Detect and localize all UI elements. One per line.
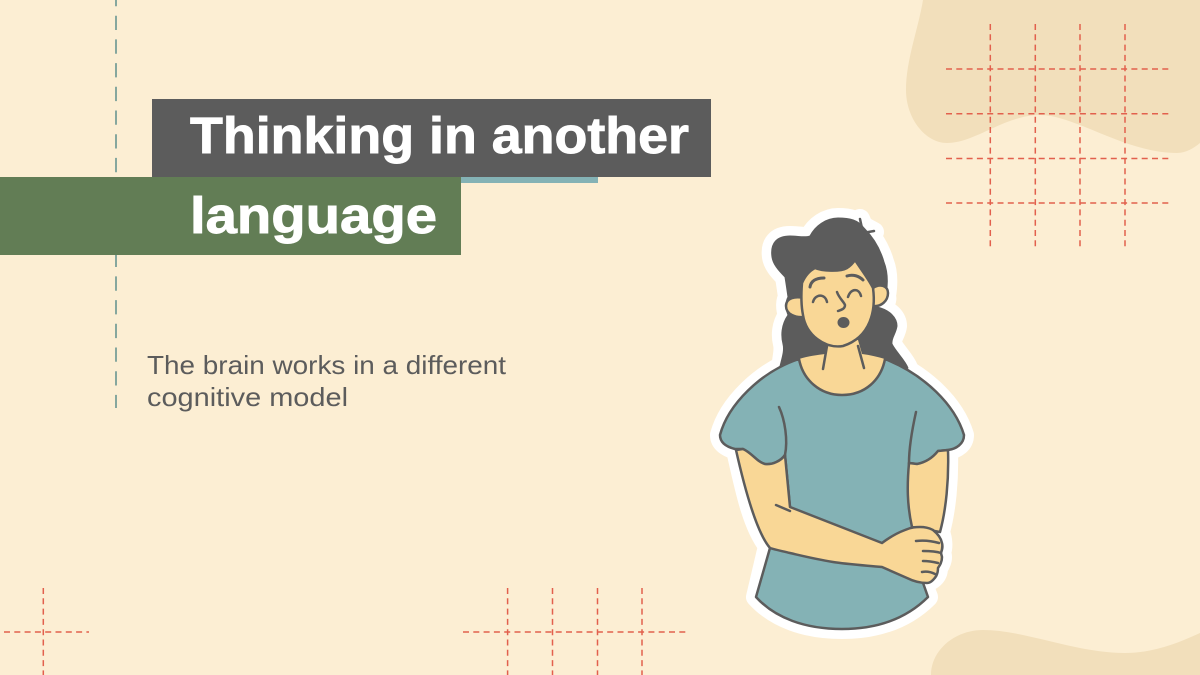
arm and finger lines xyxy=(776,505,941,574)
subtitle text: The brain works in a different xyxy=(147,350,507,380)
face xyxy=(801,260,874,346)
accent bar: teal xyxy=(461,177,598,183)
blob: top right xyxy=(906,0,1200,153)
dashed grid: top right xyxy=(946,24,1171,248)
dashed vertical line: left xyxy=(115,0,117,408)
hair xyxy=(772,218,908,375)
blob: bottom right xyxy=(931,630,1200,675)
left ear xyxy=(786,297,804,317)
title line 1: Thinking in another xyxy=(190,107,689,164)
right ear xyxy=(873,286,888,306)
right arm xyxy=(908,450,948,532)
title block xyxy=(0,99,711,255)
title bar: dark xyxy=(152,99,711,177)
sticker outline: white xyxy=(720,218,964,629)
title bar: green xyxy=(0,177,461,255)
illustration: woman with crossed arm xyxy=(720,218,964,629)
shirt body xyxy=(720,359,964,629)
dashed grid: bottom centre xyxy=(463,588,688,675)
facial features xyxy=(810,275,864,369)
subtitle text xyxy=(147,350,507,412)
neck and chest xyxy=(799,340,885,395)
left arm and hand xyxy=(736,449,942,583)
subtitle text: cognitive model xyxy=(147,382,348,412)
dashed grid: bottom left xyxy=(4,588,89,675)
title line 2: language xyxy=(190,187,437,244)
sleeve seams xyxy=(779,407,916,463)
